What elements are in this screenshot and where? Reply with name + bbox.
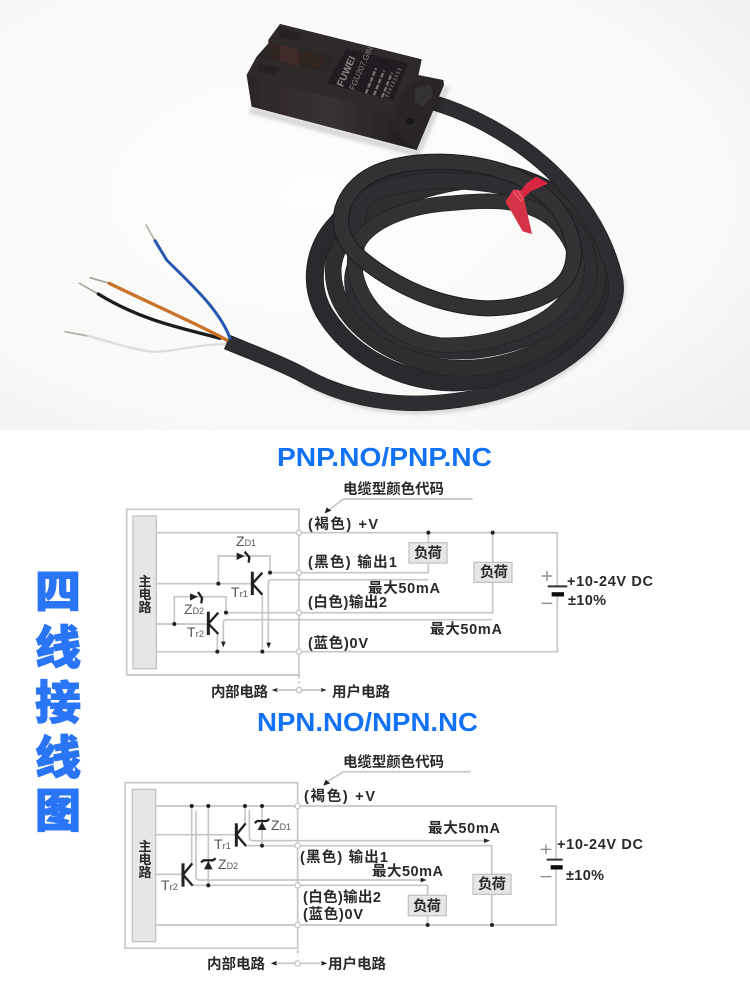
battery [548,583,567,589]
wiring diagram: PNP: +10-24V DC [567,574,654,590]
wiring diagram: NPN: +10-24V DC [557,837,644,853]
wiring diagram: PNP: Tr2 [187,624,204,640]
wiring diagram: NPN: 主 [138,839,152,854]
battery [547,857,563,863]
stripped wires [65,225,230,352]
wiring diagram: NPN: 内部电路 [207,955,266,973]
wiring diagram: PNP: (白色)输出2 [308,593,387,611]
wiring diagram: PNP: ZD1 [236,533,256,549]
wiring diagram: PNP: 主 [138,574,152,589]
wiring diagram: PNP: ZD2 [184,601,204,617]
cable coil [227,102,621,410]
photo: sensor with cable [0,0,750,430]
wiring diagram: NPN: 用户电路 [328,955,386,973]
loads [409,543,447,563]
sensor label: FUWEI [335,54,359,89]
heading: NPN: NPN.NO/NPN.NC [257,707,478,737]
side title: 线 [35,732,81,784]
nodes [295,803,300,809]
wiring diagram: NPN: (白色)输出2 [303,888,381,906]
arrows [221,507,331,692]
wiring diagram: NPN: ±10% [566,868,604,884]
wiring diagram: PNP: 负荷 [480,563,508,581]
wiring diagram: NPN: (黑色) 输出1 [300,848,388,866]
wiring diagram: PNP: 负荷 [414,544,442,562]
junction dots [172,531,495,654]
wiring diagram: NPN: ZD1 [271,817,291,833]
arrows [271,780,490,966]
sensor label [327,45,408,100]
sensor body [247,24,447,153]
wiring diagram: NPN: (褐色) +V [304,787,375,805]
wiring diagram: NPN: (蓝色)0V [303,905,363,923]
wiring diagram: PNP: (黑色) 输出1 [308,553,397,571]
wiring diagram: NPN: Tr2 [161,877,178,893]
wiring diagram: NPN: 最大50mA [372,863,444,880]
wiring diagram: PNP: 电 [138,587,152,602]
wiring diagram: PNP: 最大50mA [368,580,441,597]
rubber band [505,177,548,234]
wiring diagram: NPN: 负荷 [413,897,441,915]
transistors [232,823,241,847]
wiring diagram: NPN: 电 [138,852,152,867]
wiring diagram: NPN: 负荷 [478,875,506,893]
sensor label: FGU207.GIN [348,45,375,91]
heading: PNP: PNP.NO/PNP.NC [277,442,492,472]
wiring diagram: NPN: 最大50mA [428,820,501,837]
loads [408,895,446,916]
wiring diagram: PNP: (褐色) +V [308,515,378,533]
side title: 图 [35,785,81,837]
wiring diagram: PNP: ±10% [568,593,606,609]
zener diodes [258,822,266,830]
wiring diagram: PNP: Tr1 [231,584,248,600]
wiring diagram: PNP: 用户电路 [332,683,390,701]
wiring diagram: NPN [125,753,644,973]
zener diodes [237,553,245,560]
wiring diagram: PNP [127,480,654,701]
wiring diagram: NPN: ZD2 [218,856,238,872]
nodes [296,530,302,535]
wiring diagram: PNP: 内部电路 [211,683,268,701]
wiring diagram: PNP: 电缆型颜色代码 [343,480,444,498]
junction dots [190,804,494,927]
wiring diagram: NPN: 电缆型颜色代码 [343,753,444,771]
side title: 线 [35,622,81,674]
side title: 四 [35,566,81,618]
wiring diagram: PNP: (蓝色)0V [308,634,368,652]
side title: 接 [35,677,81,729]
wiring diagram: NPN: Tr1 [214,836,231,852]
side title [35,566,81,837]
transistors [248,572,257,595]
wiring diagram: NPN: 路 [138,865,152,880]
wiring diagram: PNP: 路 [138,600,152,615]
wiring diagram: PNP: 最大50mA [430,621,503,638]
